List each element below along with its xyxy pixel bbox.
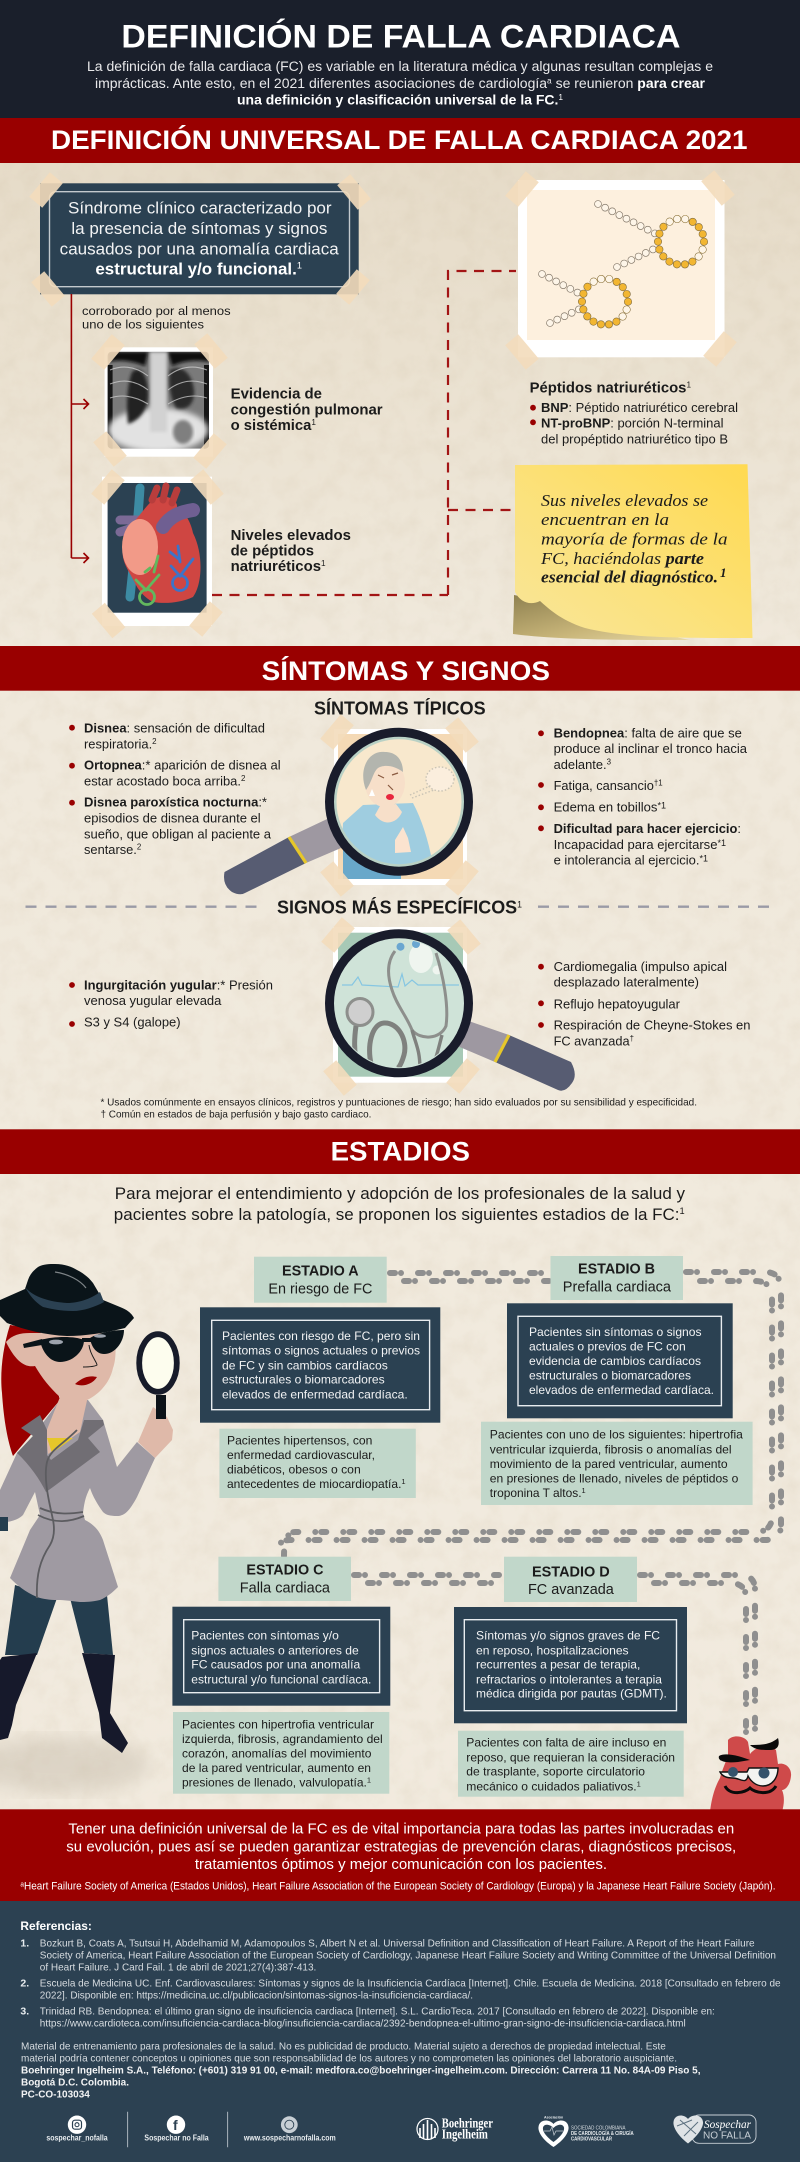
lips <box>75 1376 97 1385</box>
text block: péptidos natriuréticos: NT-proBNP: porción N-terminal <box>541 416 724 431</box>
text: corroborado: corroborado por al menos <box>82 304 231 318</box>
list: síntomas izquierda: sentarse. <box>84 842 137 857</box>
references list: 1. <box>20 1938 29 1950</box>
panel: definition box: causados por una anomalía cardiaca <box>60 240 340 258</box>
list: síntomas derecha: Fatiga, cansancio <box>554 778 656 793</box>
list: signos izquierda: S3 y S4 (galope) <box>84 1015 181 1030</box>
intro text <box>87 59 713 108</box>
lens with patient <box>330 732 468 880</box>
logo: sociedad colombiana de cardiología <box>538 2116 634 2147</box>
list: signos derecha: desplazado lateralmente) <box>554 975 699 990</box>
panel: definition box: la presencia de síntomas y signos <box>71 220 327 238</box>
list: síntomas izquierda: sueño, que obligan al paciente a <box>84 826 272 841</box>
hat <box>0 1264 134 1336</box>
intro text: La definición de falla cardiaca (FC) es variable en la literatura médica y algunas resultan complejas e <box>87 59 713 74</box>
list: síntomas izquierda: 2 <box>241 774 246 783</box>
icon: instagram <box>46 2116 108 2143</box>
description box: de FC y sin cambios cardíacos <box>222 1358 388 1372</box>
panel: definition box: estructural y/o funcional. <box>95 260 292 278</box>
description box: en reposo, hospitalizaciones <box>476 1643 629 1657</box>
closing panel: tratamientos óptimos y mejor comunicación con los pacientes. <box>195 1856 607 1873</box>
legs and boots <box>0 1585 128 1753</box>
callout: sticky note: esencial del diagnóstico. <box>541 568 718 587</box>
patients box: ventricular izquierda, fibrosis o anomalías del <box>490 1442 732 1456</box>
nose <box>83 1345 97 1367</box>
patients box: troponina T altos. <box>490 1486 582 1500</box>
closing panel: a <box>20 1881 24 1888</box>
list: síntomas izquierda: Ortopnea:* aparición de disnea al <box>84 758 281 773</box>
icon: web <box>243 2116 336 2143</box>
disclaimer <box>21 2040 701 2100</box>
section heading: síntomas y signos <box>0 646 800 691</box>
panel: estadio A <box>200 1257 440 1498</box>
hand <box>138 1407 173 1458</box>
text: evidencia <box>231 386 383 434</box>
text: evidencia: congestión pulmonar <box>231 402 383 418</box>
list: síntomas izquierda <box>69 720 281 857</box>
text: evidencia: o sistémica <box>231 418 310 434</box>
closing panel <box>0 1809 800 1901</box>
logo: sospechar no falla: NO FALLA <box>703 2130 751 2142</box>
callout: sticky note: encuentran en la <box>541 510 669 529</box>
held magnifier <box>139 1334 177 1419</box>
list: síntomas derecha: e intolerancia al ejercicio. <box>554 853 700 868</box>
text: niveles elevados: de péptidos <box>231 544 314 560</box>
list: signos derecha: Cardiomegalia (impulso apical <box>554 959 727 974</box>
label: estadio D <box>504 1557 637 1602</box>
patients box: en presiones de llenado, niveles de péptidos o <box>490 1471 739 1485</box>
disclaimer: material podría contener conceptos u opiniones que son responsabilidad de los autores y no comprometen las opiniones del laboratorio auspiciante. <box>21 2052 677 2064</box>
label: estadio C <box>218 1557 351 1601</box>
section heading: estadios <box>0 1129 800 1174</box>
description box: signos actuales o anteriores de <box>191 1643 359 1657</box>
disclaimer: Boehringer Ingelheim S.A., Teléfono: (+601) 319 91 00, e-mail: medfora.co@boehringer-ingelheim.com. Dirección: Carrera 11 No. 84A-09 Piso 5, <box>21 2064 701 2076</box>
list: síntomas izquierda: episodios de disnea durante el <box>84 810 261 825</box>
references list <box>20 1938 781 2030</box>
heading: signos más específicos: 1 <box>517 899 522 909</box>
patients box: Pacientes hipertensos, con <box>227 1433 372 1447</box>
list: síntomas derecha: produce al inclinar el tronco hacia <box>554 741 748 756</box>
description box: síntomas o signos actuales o previos <box>222 1344 420 1358</box>
patients box: de trasplante, soporte circulatorio <box>466 1765 645 1779</box>
patients box: Pacientes con falta de aire incluso en <box>466 1736 666 1750</box>
references list: Trinidad RB. Bendopnea: el último gran signo de insuficiencia cardiaca [Internet]. S.L. CardioTeca. 2017 [Consultado en febrero de 2022]. Disponible en: <box>40 2006 715 2018</box>
list: signos izquierda <box>69 977 273 1030</box>
section heading: definición universal <box>0 118 800 163</box>
list: síntomas izquierda: 2 <box>137 842 142 852</box>
description box: FC causados por una anomalía <box>191 1658 361 1672</box>
list: signos izquierda: Ingurgitación yugular:* Presión <box>84 977 273 992</box>
label: estadio C: Falla cardiaca <box>240 1580 331 1596</box>
references list: 3. <box>20 2006 29 2018</box>
references list: Bozkurt B, Coats A, Tsutsui H, Abdelhamid M, Adamopoulos S, Albert N et al. Universal Definition and Classification of Heart Failure. A Report of the Heart Failure <box>40 1938 755 1950</box>
references list: of Heart Failure. J Card Fail. 1 de abril de 2021;27(4):387-413. <box>40 1962 316 1974</box>
photo card: x-ray <box>91 333 228 469</box>
intro text: una definición y clasificación universal de la FC. <box>237 93 545 108</box>
list: síntomas izquierda: estar acostado boca arriba. <box>84 774 242 789</box>
illustration: detective <box>0 1264 177 1793</box>
icon: web: www.sospecharnofalla.com <box>243 2133 336 2143</box>
logo: sospechar no falla <box>673 2115 756 2144</box>
patients box: corazón, anomalías del movimiento <box>182 1747 372 1761</box>
description box: elevados de enfermedad cardíaca. <box>222 1387 408 1401</box>
description box: Pacientes con riesgo de FC, pero sin <box>222 1329 420 1343</box>
heading: signos más específicos <box>26 896 769 917</box>
label: estadio D: FC avanzada <box>528 1582 615 1598</box>
logo: sociedad colombiana de cardiología: CARDIOVASCULAR <box>571 2137 612 2143</box>
icon: facebook: f <box>173 2117 178 2133</box>
magnifier handle <box>495 1035 575 1091</box>
intro text: imprácticas. Ante esto, en el 2021 diferentes asociaciones de cardiología <box>95 76 527 91</box>
patients box: movimiento de la pared ventricular, aumento <box>490 1457 728 1471</box>
patients box: diabéticos, obesos o con <box>227 1462 361 1476</box>
intro: estadios: Para mejorar el entendimiento y adopción de los profesionales de la salud y <box>115 1185 686 1203</box>
text block: péptidos natriuréticos: 1 <box>686 381 692 390</box>
peptide molecule: lower <box>542 272 634 331</box>
description box: Pacientes con síntomas y/o <box>191 1629 339 1643</box>
closing panel: su evolución, pues así se pueden garantizar estrategias de prevención claras, diagnósticos precisos, <box>66 1838 736 1855</box>
patients box: mecánico o cuidados paliativos. <box>466 1779 636 1793</box>
disclaimer: Bogotá D.C. Colombia. <box>21 2076 129 2088</box>
logo: Boehringer Ingelheim: Ingelheim <box>442 2126 488 2141</box>
text block: péptidos natriuréticos: BNP: Péptido natriurético cerebral <box>541 400 738 415</box>
footprints trail <box>276 1272 781 1735</box>
text block: péptidos natriuréticos: Péptidos natriuréticos <box>530 381 683 397</box>
patients box <box>481 1422 753 1505</box>
description box: recurrentes a pesar de terapia, <box>476 1658 640 1672</box>
patients box <box>173 1712 389 1794</box>
callout: sticky note: mayoría de formas de la <box>541 529 728 548</box>
callout: sticky note: 1 <box>720 565 726 580</box>
patients box: izquierda, fibrosis, agrandamiento del <box>182 1732 383 1746</box>
patients box: 1 <box>637 1779 641 1788</box>
text: niveles elevados: Niveles elevados <box>231 528 351 544</box>
title: DEFINICIÓN DE FALLA CARDIACA <box>121 17 680 54</box>
description box: Síntomas y/o signos graves de FC <box>476 1629 660 1643</box>
text: corroborado: uno de los siguientes <box>82 317 204 331</box>
footnotes: † Común en estados de baja perfusión y bajo gasto cardiaco. <box>100 1109 371 1121</box>
references heading: Referencias: <box>20 1919 92 1933</box>
heading: síntomas típicos: SÍNTOMAS TÍPICOS <box>314 697 486 718</box>
list: signos derecha: Respiración de Cheyne-Stokes en <box>554 1018 750 1033</box>
list: síntomas izquierda: 2 <box>152 737 157 746</box>
logo: Boehringer Ingelheim <box>417 2115 493 2141</box>
footnotes: * Usados comúnmente en ensayos clínicos, registros y puntuaciones de riesgo; han sido evaluados por su sensibilidad y especificidad. <box>100 1097 697 1109</box>
description box: estructurales o biomarcadores <box>529 1369 691 1383</box>
trench coat <box>0 1392 155 1602</box>
description box: refractarios o intolerantes a terapia <box>476 1672 662 1686</box>
section heading: estadios: ESTADIOS <box>331 1137 470 1167</box>
icon: instagram: sospechar_nofalla <box>46 2133 108 2143</box>
panel: definition box: Síndrome clínico caracterizado por <box>68 199 332 217</box>
text: niveles elevados: 1 <box>321 559 326 568</box>
list: síntomas derecha: Bendopnea: falta de aire que se <box>554 725 742 740</box>
description box: Pacientes sin síntomas o signos <box>529 1325 702 1339</box>
logo: sociedad colombiana de cardiología: DE CARDIOLOGÍA & CIRUGÍA <box>571 2129 634 2137</box>
patients box: 1 <box>401 1477 406 1486</box>
description box: elevados de enfermedad cardíaca. <box>529 1383 714 1397</box>
disclaimer: Material de entrenamiento para profesionales de la salud. No es publicidad de producto. Material sujeto a derechos de propiedad intelectual. Este <box>21 2040 666 2052</box>
description box <box>200 1307 440 1423</box>
list: signos derecha: FC avanzada <box>554 1033 631 1048</box>
text block: péptidos natriuréticos: del propéptido natriurético tipo B <box>541 431 728 446</box>
patients box: reposo, que requieran la consideración <box>466 1750 675 1764</box>
description box: actuales o previos de FC con <box>529 1340 686 1354</box>
divider lines <box>128 2112 228 2147</box>
panel: estadio B <box>481 1256 753 1505</box>
intro text: a <box>547 76 552 86</box>
patients box: 1 <box>582 1486 586 1495</box>
panel: estadio C <box>172 1557 390 1794</box>
label: estadio A: En riesgo de FC <box>268 1281 372 1297</box>
list: signos derecha: † <box>630 1034 634 1043</box>
callout: sticky note <box>513 464 752 640</box>
label: estadio A <box>254 1257 387 1303</box>
patients box: de la pared ventricular, aumento en <box>182 1761 371 1775</box>
description box: médica dirigida por pautas (GDMT). <box>476 1687 667 1701</box>
patients box: 1 <box>367 1776 371 1785</box>
illustration: magnifier with patient <box>224 714 479 897</box>
intro text: para crear <box>637 76 706 91</box>
description box: evidencia de cambios cardíacos <box>529 1354 701 1368</box>
description box: estructural y/o funcional cardíaca. <box>191 1672 371 1686</box>
panel: definition box <box>29 172 371 307</box>
list: síntomas derecha: adelante. <box>554 757 607 772</box>
list: síntomas izquierda: respiratoria. <box>84 736 153 751</box>
disclaimer: PC-CO-103034 <box>21 2088 90 2100</box>
description box <box>172 1607 390 1706</box>
patients box: enfermedad cardiovascular, <box>227 1448 375 1462</box>
icon: facebook: Sospechar no Falla <box>144 2133 209 2143</box>
callout: sticky note: FC, haciéndolas parte <box>540 549 704 568</box>
label: estadio C: ESTADIO C <box>246 1563 324 1579</box>
references list: Escuela de Medicina UC. Enf. Cardiovasculares: Síntomas y signos de la Insuficiencia Cardíaca [Internet]. Chile. Escuela de Medicina. 2018 [Consultado en febrero de <box>40 1978 781 1990</box>
text: niveles elevados: natriuréticos <box>231 559 318 575</box>
photo card: peptide chains <box>505 170 737 370</box>
description box <box>507 1303 733 1418</box>
magnifier handle <box>224 837 306 894</box>
references list: Society of America, Heart Failure Association of the European Society of Cardiology, Japanese Heart Failure Society and Writing Committee of the Universal Definition <box>40 1950 776 1962</box>
illustration: magnifier with stethoscope <box>321 917 575 1096</box>
list: signos derecha: Reflujo hepatoyugular <box>554 996 681 1011</box>
closing panel: Tener una definición universal de la FC es de vital importancia para todas las partes involucradas en <box>68 1820 734 1837</box>
sunglasses <box>23 1330 124 1362</box>
description box <box>454 1607 687 1723</box>
connector: red bracket with arrows <box>71 294 88 563</box>
intro: estadios: 1 <box>680 1206 685 1216</box>
label: estadio D: ESTADIO D <box>532 1565 610 1581</box>
header panel <box>0 0 800 118</box>
hair <box>1 1325 60 1456</box>
references panel <box>0 1901 800 2162</box>
list: síntomas derecha: Incapacidad para ejercitarse <box>554 837 717 852</box>
patients box: presiones de llenado, valvulopatía. <box>182 1776 367 1790</box>
section heading: síntomas y signos: SÍNTOMAS Y SIGNOS <box>262 655 550 686</box>
label: estadio A: ESTADIO A <box>282 1263 359 1279</box>
intro: estadios: pacientes sobre la patología, se proponen los siguientes estadios de la FC: <box>114 1206 663 1224</box>
intro: estadios <box>114 1185 686 1224</box>
panel: estadio D <box>454 1557 687 1797</box>
label: estadio B <box>550 1256 683 1300</box>
list: síntomas derecha: Dificultad para hacer ejercicio: <box>554 821 741 836</box>
list: síntomas derecha: *1 <box>657 801 666 811</box>
photo card: heart <box>91 469 224 638</box>
heading: signos más específicos: SIGNOS MÁS ESPECÍFICOS <box>277 896 525 917</box>
face <box>6 1333 116 1401</box>
logo: sociedad colombiana de cardiología: SOCIEDAD COLOMBIANA <box>571 2125 626 2131</box>
list: síntomas derecha <box>538 725 748 868</box>
footnotes <box>100 1097 697 1121</box>
intro text: 1 <box>558 93 564 102</box>
references list: https://www.cardioteca.com/insuficiencia-cardiaca-blog/insuficiencia-cardiaca/2392-bendopnea-el-ultimo-gran-signo-de-insuficiencia-cardiaca.html <box>40 2018 686 2030</box>
logo: sociedad colombiana de cardiología: Asociación <box>544 2116 563 2120</box>
text block: péptidos natriuréticos <box>530 381 738 446</box>
text: niveles elevados <box>231 528 351 575</box>
list: síntomas izquierda: Disnea: sensación de dificultad <box>84 720 265 735</box>
references list: 2. <box>20 1978 29 1990</box>
intro text: se reunieron <box>552 76 637 91</box>
patients box: Pacientes con hipertrofia ventricular <box>182 1717 374 1731</box>
list: síntomas derecha: *1 <box>699 854 708 864</box>
text: evidencia: 1 <box>311 418 317 427</box>
list: síntomas derecha: 3 <box>607 758 612 766</box>
lens with stethoscope <box>330 934 468 1073</box>
patients box <box>458 1731 684 1797</box>
patients box: Pacientes con uno de los siguientes: hipertrofia <box>490 1428 743 1442</box>
list: síntomas izquierda: Disnea paroxística nocturna:* <box>84 795 267 810</box>
connector: dashed red lines <box>212 271 516 595</box>
label: estadio B: ESTADIO B <box>578 1261 655 1277</box>
text: corroborado <box>82 304 231 331</box>
section heading: definición universal: DEFINICIÓN UNIVERSAL DE FALLA CARDIACA 2021 <box>51 124 747 155</box>
text: evidencia: Evidencia de <box>231 386 322 402</box>
logo: sospechar no falla: Sospechar <box>704 2117 751 2131</box>
references list: 2022]. Disponible en: https://medicina.uc.cl/publicacion/sintomas-signos-la-insuficiencia-cardiaca/. <box>40 1990 473 2002</box>
illustration: heart mascot <box>710 1736 791 1812</box>
peptide molecule: upper <box>598 204 710 271</box>
list: signos derecha <box>538 959 750 1048</box>
icon: facebook <box>144 2116 209 2143</box>
panel: definition box: 1 <box>297 260 302 270</box>
list: síntomas derecha: †1 <box>654 778 663 788</box>
description box: estructurales o biomarcadores <box>222 1373 385 1387</box>
callout: sticky note: Sus niveles elevados se <box>541 491 708 510</box>
list: síntomas derecha: *1 <box>717 838 726 848</box>
logo: Boehringer Ingelheim: Boehringer <box>442 2115 493 2130</box>
patients box <box>219 1429 416 1498</box>
list: síntomas derecha: Edema en tobillos <box>554 800 657 815</box>
list: signos izquierda: venosa yugular elevada <box>84 993 222 1008</box>
patients box: antecedentes de miocardiopatía. <box>227 1477 401 1491</box>
label: estadio B: Prefalla cardiaca <box>563 1280 672 1296</box>
